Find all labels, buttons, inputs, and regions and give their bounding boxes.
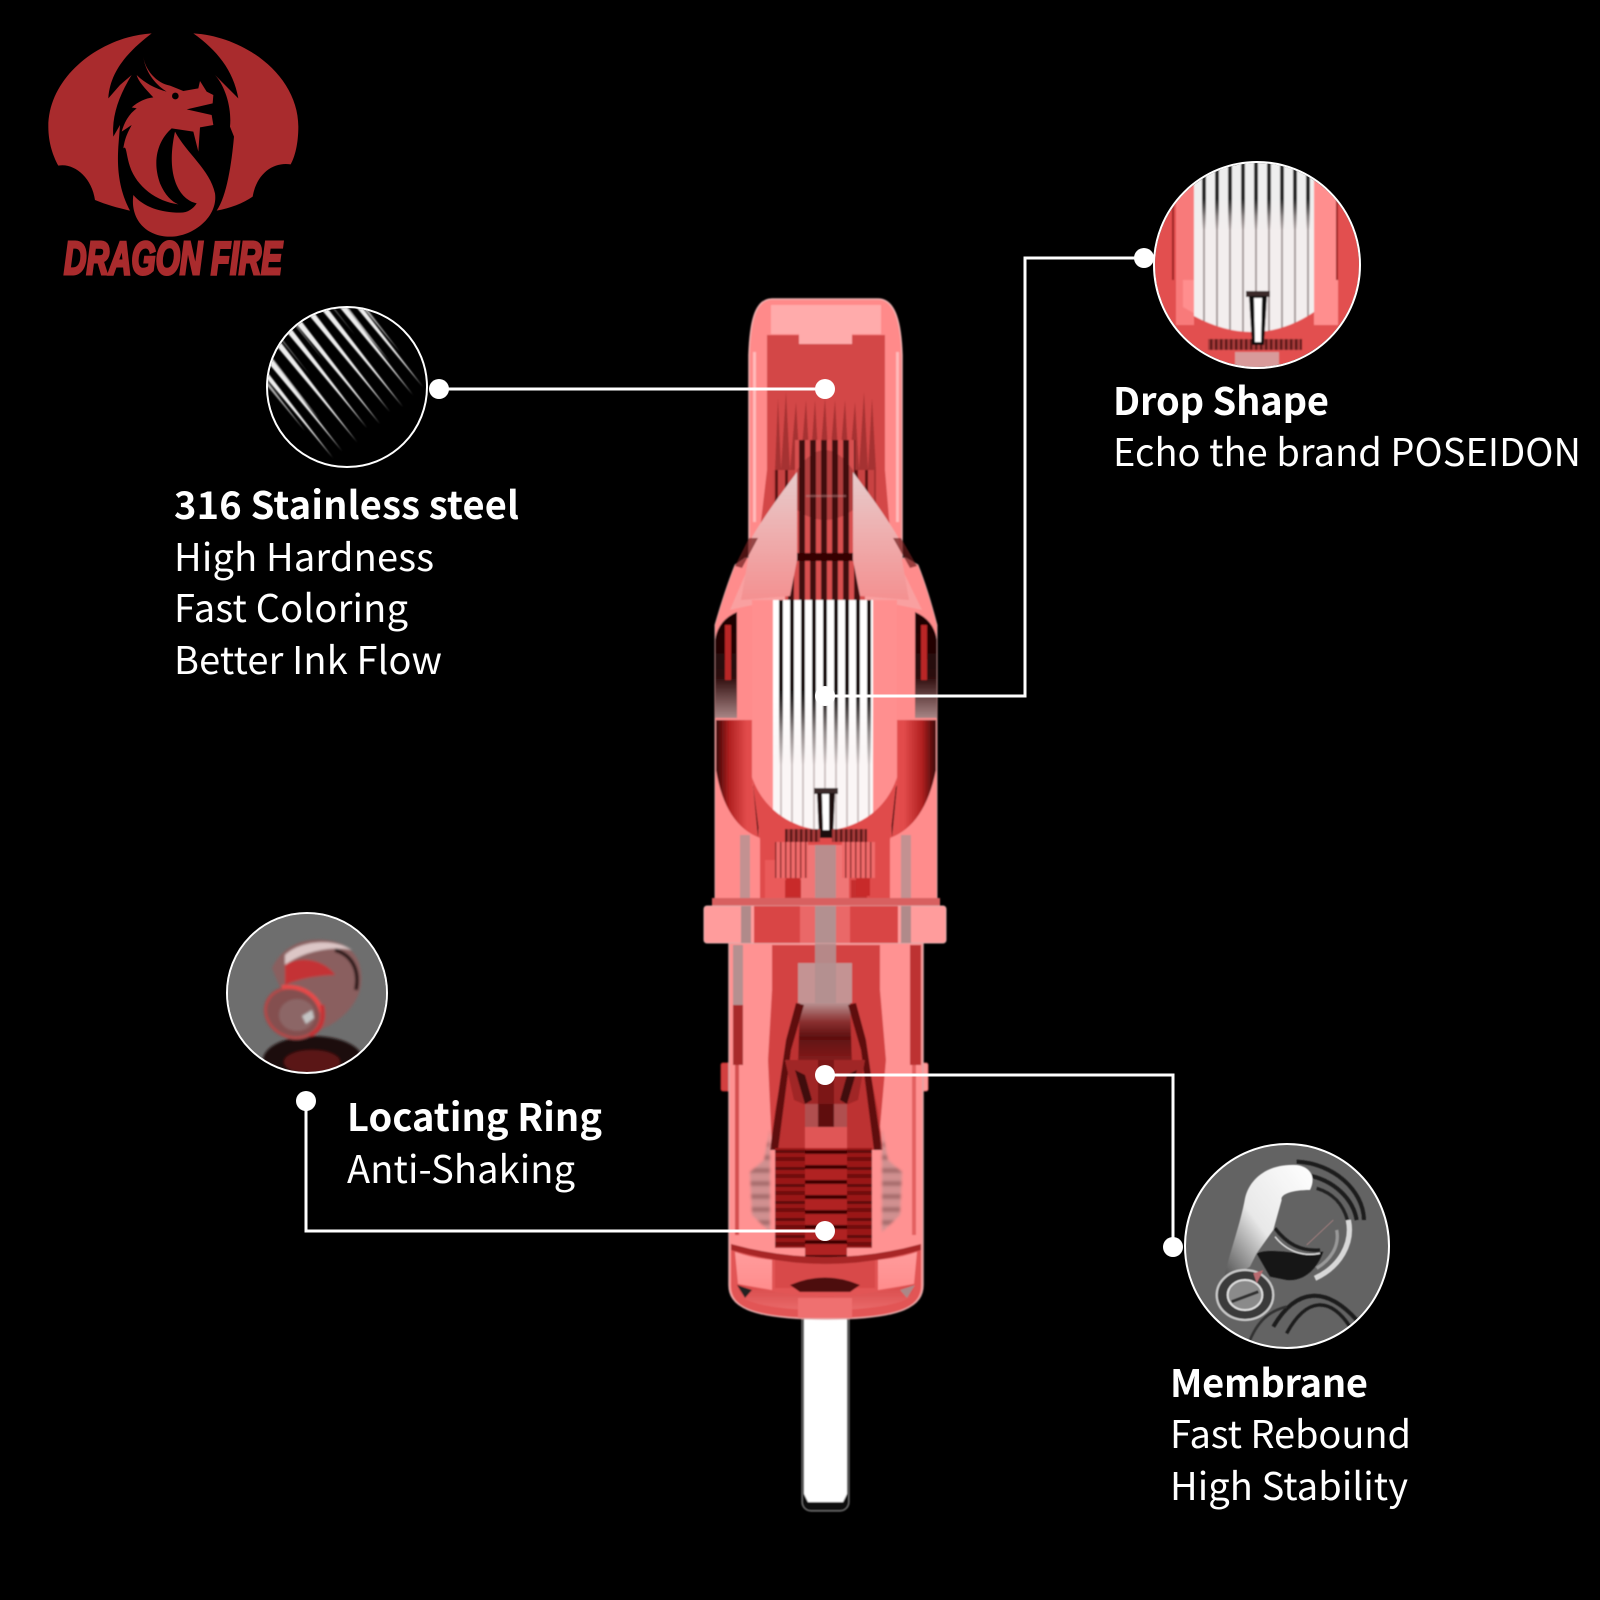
text: drop shape — [1113, 371, 1581, 477]
text: 316 stainless steel — [174, 475, 519, 685]
cartridge side chambers — [715, 612, 937, 838]
thumbnail: needle points — [266, 306, 428, 468]
callout: drop shape — [815, 160, 1581, 706]
leader end dot on cartridge — [815, 1065, 835, 1085]
logo emblem: dragon and wings — [48, 33, 298, 237]
cartridge flange — [704, 898, 946, 943]
text: drop shape: Drop Shape — [1113, 371, 1329, 426]
cartridge lower body centre — [740, 777, 911, 943]
leader end dot on thumbnail — [429, 379, 449, 399]
membrane ring stack — [775, 1148, 872, 1248]
thumbnail: membrane — [1185, 1144, 1389, 1348]
leader line — [306, 1101, 825, 1231]
grey membrane ribs — [750, 1130, 902, 1232]
text: 316 stainless steel: High Hardness — [174, 527, 434, 582]
text: drop shape: Echo the brand POSEIDON — [1113, 422, 1581, 477]
text: locating ring: Locating Ring — [347, 1087, 602, 1142]
bottom cap — [731, 1244, 921, 1318]
logo wordmark: DRAGON FIRE — [64, 232, 283, 284]
leader end dot near thumbnail — [1163, 1237, 1183, 1257]
callout: 316 stainless steel — [175, 306, 835, 674]
translucent cone left — [741, 472, 797, 600]
cartridge lower barrel — [729, 845, 923, 1319]
leader line — [439, 388, 825, 390]
text: membrane — [1170, 1353, 1411, 1511]
membrane cone — [770, 1003, 883, 1150]
leader end dot on cartridge — [815, 379, 835, 399]
leader end dot on thumbnail — [1134, 248, 1154, 268]
text: 316 stainless steel: Fast Coloring — [174, 578, 408, 633]
text: 316 stainless steel: Better Ink Flow — [174, 630, 442, 685]
comb teeth — [775, 829, 875, 896]
inner sleeve — [798, 963, 852, 1005]
callout: locating ring — [227, 913, 835, 1241]
leader line — [825, 1075, 1173, 1247]
text: locating ring: Anti-Shaking — [347, 1139, 575, 1194]
needle window — [752, 600, 897, 835]
thumbnail: drop shaped window — [1150, 160, 1365, 372]
text: locating ring — [347, 1087, 602, 1194]
needle points inside tip — [773, 392, 876, 558]
logo: Dragon Fire — [48, 33, 298, 284]
needle bar tip — [814, 788, 838, 838]
cartridge needle shaft — [802, 1310, 849, 1511]
cartridge clip tabs — [721, 1063, 928, 1091]
text: membrane: High Stability — [1170, 1456, 1408, 1511]
text: membrane: Fast Rebound — [1170, 1404, 1411, 1459]
leader line — [825, 258, 1144, 696]
text: membrane: Membrane — [1170, 1353, 1368, 1408]
translucent cone right — [853, 472, 909, 600]
text: 316 stainless steel: 316 Stainless steel — [174, 475, 519, 530]
callout: membrane — [815, 1065, 1411, 1511]
product: tattoo needle cartridge — [704, 299, 946, 1511]
leader end dot near thumbnail — [296, 1091, 316, 1111]
leader end dot on cartridge — [815, 686, 835, 706]
cartridge tip housing — [749, 299, 902, 565]
leader end dot on cartridge — [815, 1221, 835, 1241]
thumbnail: locating ring — [227, 913, 387, 1084]
cartridge mid body shoulder — [715, 472, 937, 905]
inner needle stem — [815, 845, 836, 1005]
